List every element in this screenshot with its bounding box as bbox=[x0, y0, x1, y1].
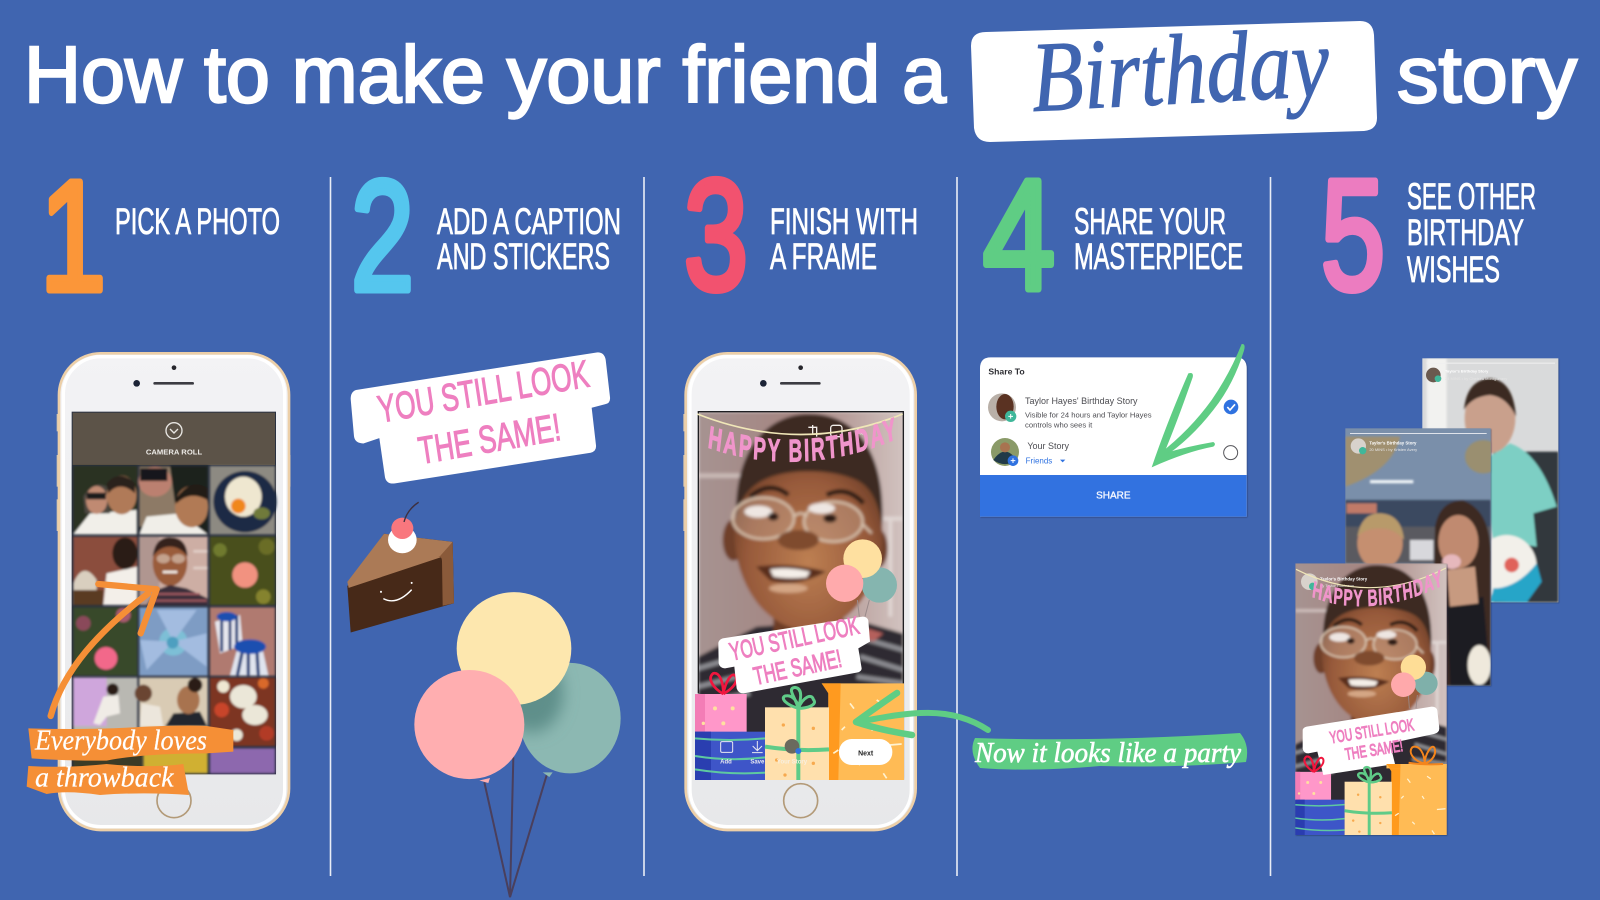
step 3 heading bbox=[770, 201, 918, 277]
panel: stickers bbox=[347, 352, 621, 897]
arrow: to share options bbox=[1152, 344, 1245, 467]
callout: everybody loves a throwback: Everybody loves bbox=[34, 724, 207, 756]
share button label: SHARE bbox=[1096, 491, 1131, 502]
story card: back bbox=[1422, 358, 1558, 602]
photo grid bbox=[73, 466, 277, 773]
title end text: story bbox=[1397, 30, 1577, 119]
caption sticker: YOU STILL LOOK bbox=[727, 612, 862, 667]
option: your story bbox=[991, 438, 1238, 466]
step 2 number: 2 bbox=[351, 149, 414, 324]
title highlight: Birthday: Birthday bbox=[1028, 6, 1332, 133]
option: birthday story: Visible for 24 hours and Taylor Hayes bbox=[1025, 410, 1152, 419]
step 5 heading bbox=[1407, 176, 1536, 290]
icons on story bbox=[808, 425, 866, 437]
editor controls: Add bbox=[720, 759, 732, 765]
camera roll screen: CAMERA ROLL bbox=[146, 448, 202, 457]
arrow: now it looks like a party bbox=[856, 693, 988, 735]
title bbox=[24, 6, 1577, 142]
step 4 heading: MASTERPIECE bbox=[1074, 236, 1243, 277]
phone frame bbox=[57, 353, 290, 830]
option: birthday story: controls who sees it bbox=[1025, 420, 1093, 429]
balloons sticker bbox=[826, 539, 897, 617]
step 3 heading: A FRAME bbox=[770, 236, 877, 277]
story photo with gifts bbox=[695, 412, 904, 780]
story card: front: YOU STILL LOOK bbox=[1328, 715, 1415, 747]
story card: front: Taylor's Birthday Story bbox=[1320, 576, 1368, 581]
option: birthday story: Taylor Hayes' Birthday Story bbox=[1025, 396, 1138, 406]
title start text: How to make your friend a bbox=[24, 30, 947, 119]
editor controls: Save bbox=[750, 759, 765, 765]
callout: now it looks like a party: Now it looks like a party bbox=[974, 738, 1242, 769]
editor controls: Your Story bbox=[777, 759, 808, 765]
icon: cake slice bbox=[347, 502, 454, 632]
step 1 number: 1 bbox=[40, 149, 106, 324]
icon: balloons bbox=[414, 592, 621, 897]
story card: back: Taylor's Birthday Story bbox=[1445, 369, 1489, 374]
banner: happy birthday: HAPPY BIRTHDAY bbox=[708, 417, 894, 462]
icons on story: Aa bbox=[855, 426, 866, 436]
camera roll screen bbox=[72, 412, 276, 774]
step 4 heading: SHARE YOUR bbox=[1074, 201, 1226, 242]
option: your story: Your Story bbox=[1027, 441, 1069, 451]
screen edge bbox=[698, 412, 903, 693]
story card: back: 24 MINS • by Chelsea Montgomery bbox=[1445, 376, 1507, 381]
card heading: Share To bbox=[988, 366, 1025, 376]
story card: front bbox=[1295, 563, 1448, 836]
step 1 heading: PICK A PHOTO bbox=[115, 201, 280, 242]
arrow to photo bbox=[51, 584, 157, 716]
step 5 heading: WISHES bbox=[1407, 249, 1500, 290]
card bbox=[980, 357, 1247, 517]
editor controls: Next bbox=[858, 751, 874, 758]
sticker: you still look the same: YOU STILL LOOK bbox=[375, 352, 592, 431]
caption sticker: THE SAME! bbox=[751, 645, 844, 691]
editor controls bbox=[720, 739, 892, 765]
story card: front: THE SAME! bbox=[1344, 736, 1404, 764]
panel: share to card bbox=[980, 344, 1247, 517]
sticker: you still look the same: THE SAME! bbox=[415, 405, 563, 472]
dividers bbox=[330, 177, 1270, 876]
story card: middle: 20 MINS • by Kristen Avery bbox=[1369, 447, 1417, 452]
step 4 heading bbox=[1074, 201, 1243, 277]
sticker: you still look the same bbox=[351, 352, 610, 484]
phone frame bbox=[683, 353, 917, 830]
panel: phone with camera roll bbox=[27, 353, 290, 830]
story card: middle: Taylor's Birthday Story bbox=[1369, 441, 1417, 446]
panel: stack of birthday stories bbox=[1295, 358, 1560, 836]
story card: front: HAPPY BIRTHDAY bbox=[1312, 570, 1440, 606]
caption sticker bbox=[718, 612, 870, 693]
step 2 heading: AND STICKERS bbox=[437, 236, 610, 277]
step 2 heading: ADD A CAPTION bbox=[437, 201, 621, 242]
story card: middle bbox=[1345, 428, 1502, 686]
step 3 heading: FINISH WITH bbox=[770, 201, 918, 242]
callout: everybody loves a throwback bbox=[27, 724, 233, 795]
step 3 number: 3 bbox=[684, 148, 748, 323]
callout: everybody loves a throwback: a throwback bbox=[35, 762, 175, 794]
step 5 number: 5 bbox=[1321, 148, 1385, 323]
step 4 number: 4 bbox=[983, 148, 1055, 323]
step 2 heading bbox=[437, 201, 621, 277]
option: your story: Friends bbox=[1026, 457, 1052, 466]
option: birthday story bbox=[988, 393, 1238, 429]
step 5 heading: BIRTHDAY bbox=[1407, 212, 1524, 253]
story card: front: by Taylor Robinson bbox=[1320, 583, 1354, 588]
panel: phone with frame bbox=[683, 352, 917, 832]
